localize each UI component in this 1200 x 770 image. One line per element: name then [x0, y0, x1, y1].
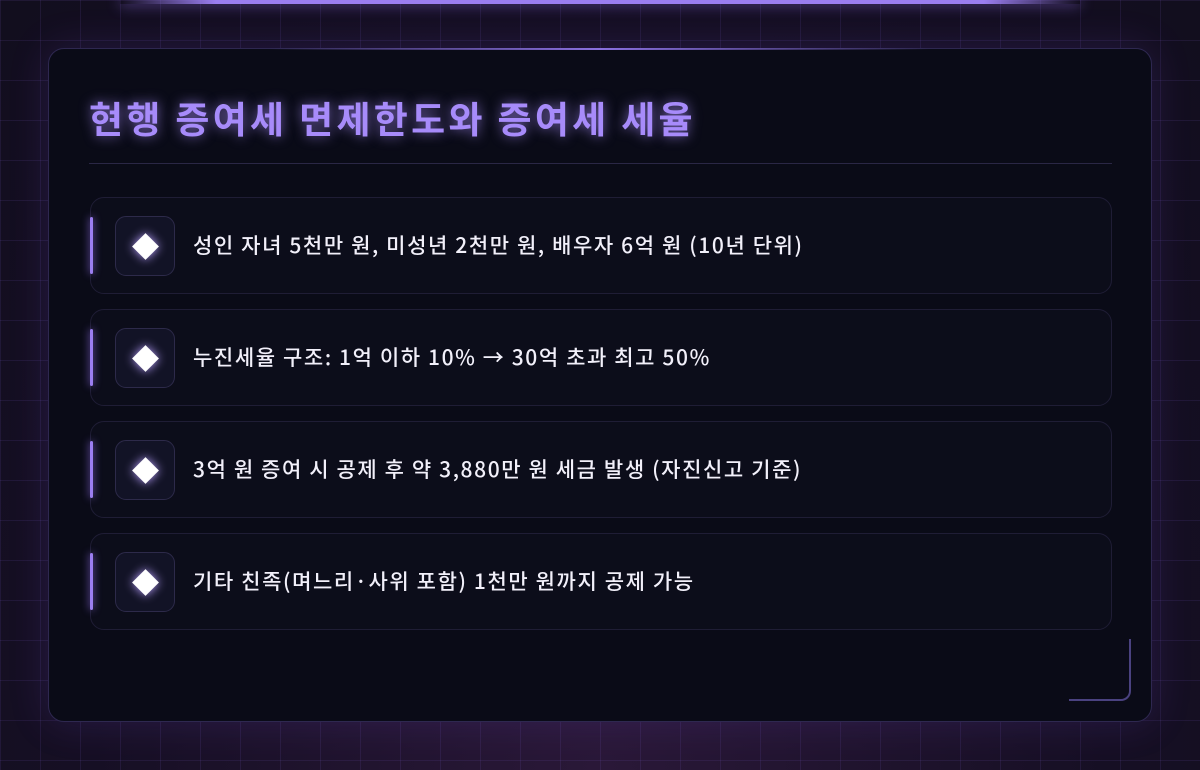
- item 1: [90, 197, 1112, 294]
- top glow line: [120, 0, 1080, 4]
- icon: diamond: [115, 328, 175, 388]
- item 3: [90, 421, 1112, 518]
- title: 현행 증여세 면제한도와 증여세 세율: [89, 90, 696, 144]
- text 4: 기타 친족(며느리·사위 포함) 1천만 원까지 공제 가능: [193, 566, 695, 596]
- icon: diamond: [115, 216, 175, 276]
- icon: diamond: [115, 552, 175, 612]
- item 4: [90, 533, 1112, 630]
- text 2: 누진세율 구조: 1억 이하 10% → 30억 초과 최고 50%: [193, 342, 711, 372]
- corner bracket: [1069, 639, 1131, 701]
- icon: diamond: [115, 440, 175, 500]
- text 3: 3억 원 증여 시 공제 후 약 3,880만 원 세금 발생 (자진신고 기준): [193, 454, 802, 484]
- item 2: [90, 309, 1112, 406]
- text 1: 성인 자녀 5천만 원, 미성년 2천만 원, 배우자 6억 원 (10년 단위): [193, 230, 804, 260]
